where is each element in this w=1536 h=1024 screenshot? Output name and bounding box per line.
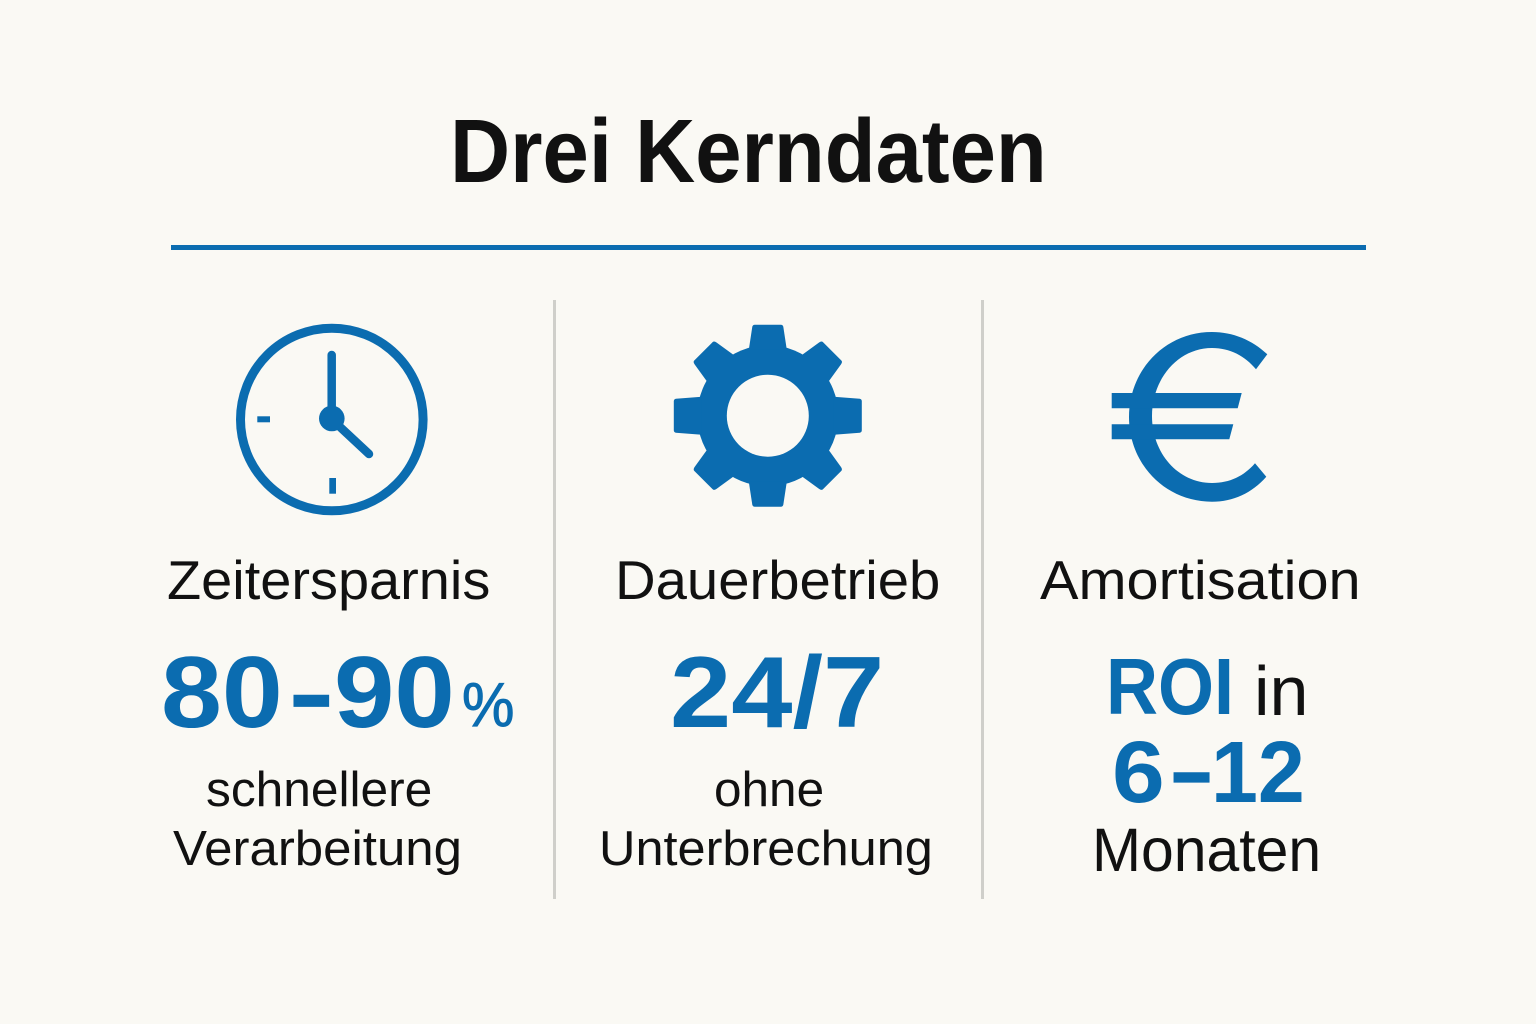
value line 1: ROI [1106, 642, 1234, 731]
value: 90 [334, 636, 455, 748]
description: Unterbrechung [598, 822, 932, 876]
description: Monaten [1092, 816, 1321, 884]
description: schnellere [206, 762, 432, 816]
label: Dauerbetrieb [615, 549, 940, 611]
value: - [288, 636, 334, 748]
value line 2 [1112, 722, 1305, 821]
value: 80 [161, 636, 283, 748]
icon: euro [1112, 332, 1268, 502]
icon: gear [674, 324, 862, 507]
column divider 2 [981, 300, 984, 899]
label: Zeitersparnis [167, 549, 490, 611]
column divider 1 [553, 300, 556, 899]
description: ohne [714, 762, 824, 816]
value line 1: in [1254, 652, 1308, 730]
value: % [462, 670, 514, 740]
value [161, 636, 514, 748]
panel: Dauerbetrieb [598, 324, 940, 876]
value line 2: 6 [1112, 724, 1165, 821]
title rule [171, 245, 1366, 250]
icon: clock [236, 324, 428, 516]
description [598, 762, 932, 876]
title: Drei Kerndaten [450, 102, 1046, 202]
panel: Zeitersparnis [161, 324, 514, 876]
description: Verarbeitung [173, 822, 462, 876]
value: 24/7 [670, 636, 884, 748]
value line 2: - [1168, 722, 1215, 819]
panel: Amortisation [1040, 332, 1361, 884]
value line 1 [1106, 642, 1308, 731]
value line 2: 12 [1211, 724, 1305, 821]
label: Amortisation [1040, 549, 1361, 611]
description [173, 762, 462, 876]
